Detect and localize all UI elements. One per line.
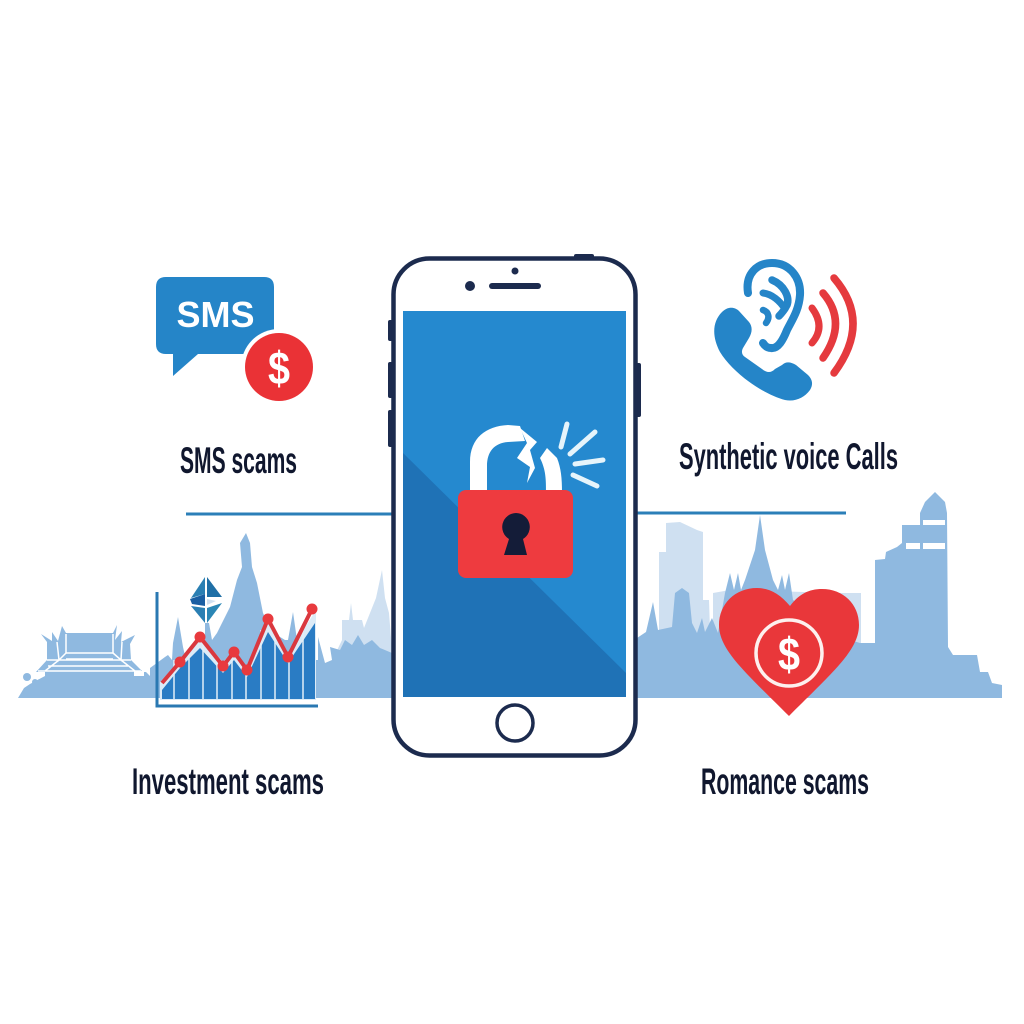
- connector line: right: [637, 512, 846, 514]
- icon: sms bubble with dollar: $: [268, 342, 290, 394]
- icon: sms bubble with dollar: SMS: [176, 294, 254, 335]
- icon: ear and handset: [714, 263, 853, 401]
- label: investment scams: Investment scams: [132, 761, 324, 802]
- label: sms scams: SMS scams: [180, 440, 297, 481]
- chart: investment line and bars: [157, 577, 318, 706]
- icon: crypto diamond: [190, 577, 222, 623]
- keyhole: [502, 513, 530, 555]
- earpiece and camera: [465, 268, 541, 291]
- bars area: [160, 610, 316, 700]
- screen: [403, 311, 626, 697]
- axes: [157, 592, 318, 706]
- red trend line: [162, 609, 312, 683]
- phone body: [394, 258, 636, 756]
- right skyline: [637, 492, 1002, 698]
- lock body: [458, 490, 573, 578]
- broken shackle: [470, 425, 562, 492]
- icon: heart with dollar coin: [719, 588, 859, 716]
- phone: [388, 254, 641, 756]
- icon: heart with dollar coin: $: [778, 628, 800, 680]
- home button: [497, 705, 533, 741]
- crack rays: [561, 424, 603, 486]
- left skyline: [18, 533, 392, 698]
- icon: sms bubble with dollar: [156, 277, 317, 405]
- trees: [23, 673, 43, 685]
- icon: thai pavilion: [36, 625, 143, 672]
- side buttons: [388, 254, 641, 447]
- label: romance scams: Romance scams: [701, 761, 869, 802]
- connector line: left: [186, 512, 392, 516]
- icon: broken padlock: [458, 424, 603, 578]
